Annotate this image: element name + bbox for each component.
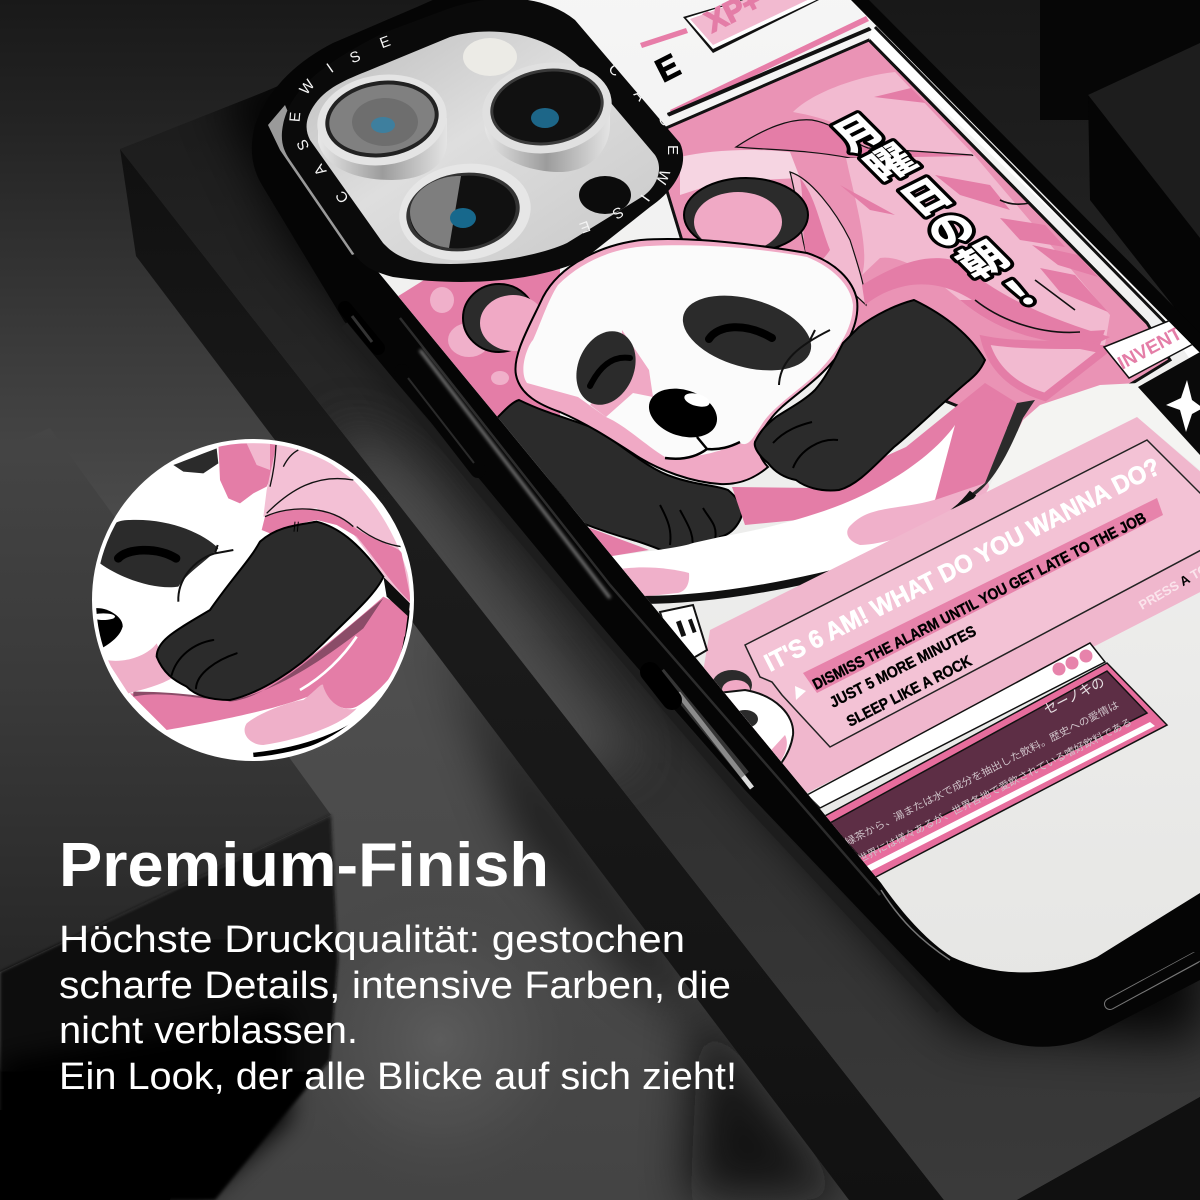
Japanese headline 月曜日の朝！: 曜 bbox=[855, 137, 926, 189]
white sheet edge right bbox=[986, 383, 1136, 492]
top comic strip bbox=[640, 0, 872, 117]
CASEWISE lettering: S bbox=[347, 48, 363, 67]
dark body under blanket and sheet shadow bbox=[641, 400, 1035, 600]
star box bbox=[1138, 352, 1200, 455]
body text: nicht verblassen. bbox=[59, 1010, 358, 1052]
side buttons bbox=[345, 308, 672, 700]
Japanese headline 月曜日の朝！: 日 bbox=[891, 171, 962, 223]
Japanese headline 月曜日の朝！ bbox=[828, 110, 1037, 308]
lens lower bbox=[393, 155, 537, 269]
CASEWISE lettering: I bbox=[636, 191, 653, 204]
CASEWISE lettering: W bbox=[296, 76, 319, 98]
lens upper right bbox=[476, 54, 618, 172]
window with Japanese text: 緑茶から、湯または水で成分を抽出した飲料。歴史への愛情は bbox=[842, 698, 1121, 849]
body text: Ein Look, der alle Blicke auf sich zieht! bbox=[59, 1056, 737, 1098]
CASEWISE lettering: A bbox=[630, 86, 649, 105]
CASEWISE lettering: S bbox=[609, 203, 626, 222]
CASEWISE lettering: C bbox=[332, 187, 352, 206]
CASEWISE lettering: E bbox=[287, 111, 304, 123]
left pink blanket bbox=[398, 268, 560, 420]
menu text: IT'S 6 AM! WHAT DO YOU WANNA DO? bbox=[760, 453, 1165, 677]
Japanese headline 月曜日の朝！: ！ bbox=[985, 267, 1056, 319]
top comic strip: E bbox=[649, 46, 686, 89]
zoom circle inset bbox=[92, 440, 418, 760]
CASEWISE lettering: W bbox=[652, 167, 673, 187]
dark body and left paw bbox=[495, 400, 742, 557]
menu text: JUST 5 MORE MINUTES bbox=[827, 623, 979, 712]
white bed sheet bbox=[588, 425, 1008, 597]
panda right ear bbox=[684, 178, 808, 252]
phone edge highlights bbox=[400, 318, 950, 960]
panda right eye patch bbox=[682, 296, 830, 385]
title: Premium-Finish bbox=[59, 831, 549, 900]
white frame strip right bbox=[869, 27, 1200, 375]
panda right arm bbox=[755, 300, 985, 490]
charging port bbox=[1110, 956, 1198, 1004]
tag INVENT: INVENT bbox=[1114, 323, 1186, 374]
tag INVENT bbox=[1104, 318, 1200, 378]
Japanese headline 月曜日の朝！: 朝 bbox=[948, 234, 1019, 286]
menu text: SLEEP LIKE A ROCK bbox=[844, 652, 975, 731]
phone case body bbox=[252, 0, 1200, 1047]
body text bbox=[59, 919, 737, 1098]
Japanese headline 月曜日の朝！: の bbox=[916, 204, 987, 256]
CASEWISE lettering: E bbox=[378, 33, 393, 52]
pink menu panel bbox=[700, 417, 1200, 793]
panda head bbox=[515, 239, 857, 484]
Japanese headline 月曜日の朝！: 月 bbox=[823, 107, 894, 159]
CASEWISE lettering: C bbox=[605, 61, 625, 80]
blanket panel bbox=[650, 40, 1170, 440]
lens upper left bbox=[311, 66, 453, 180]
body text: scharfe Details, intensive Farben, die bbox=[59, 965, 731, 1007]
phone artwork panda illustration bbox=[378, 0, 1200, 972]
CASEWISE lettering: S bbox=[294, 137, 313, 153]
CASEWISE lettering: E bbox=[577, 217, 592, 236]
CASEWISE lettering: E bbox=[664, 145, 681, 155]
panda left eye patch bbox=[576, 331, 636, 405]
small doc icon bbox=[660, 605, 707, 660]
panda nose and mouth bbox=[648, 388, 740, 460]
pink blanket under arm bbox=[732, 383, 1017, 525]
CASEWISE lettering: S bbox=[655, 111, 674, 129]
lower-left block bbox=[0, 428, 338, 1200]
window with Japanese text bbox=[807, 643, 1167, 880]
panda left ear bbox=[463, 284, 546, 352]
camera island bbox=[268, 0, 683, 282]
CASEWISE lettering bbox=[287, 33, 681, 236]
right background block bbox=[1040, 0, 1200, 340]
menu text: DISMISS THE ALARM UNTIL YOU GET LATE TO THE JOB bbox=[810, 510, 1149, 694]
CASEWISE lettering: A bbox=[311, 161, 330, 179]
CASEWISE lettering: I bbox=[324, 60, 337, 77]
body text: Höchste Druckqualität: gestochen bbox=[59, 919, 685, 961]
small panda bbox=[714, 670, 794, 763]
window with Japanese text: セーノキの bbox=[1041, 673, 1107, 718]
window with Japanese text: 世界には様々あるが、世界各地で愛飲されている嗜好飲料である bbox=[855, 715, 1134, 866]
